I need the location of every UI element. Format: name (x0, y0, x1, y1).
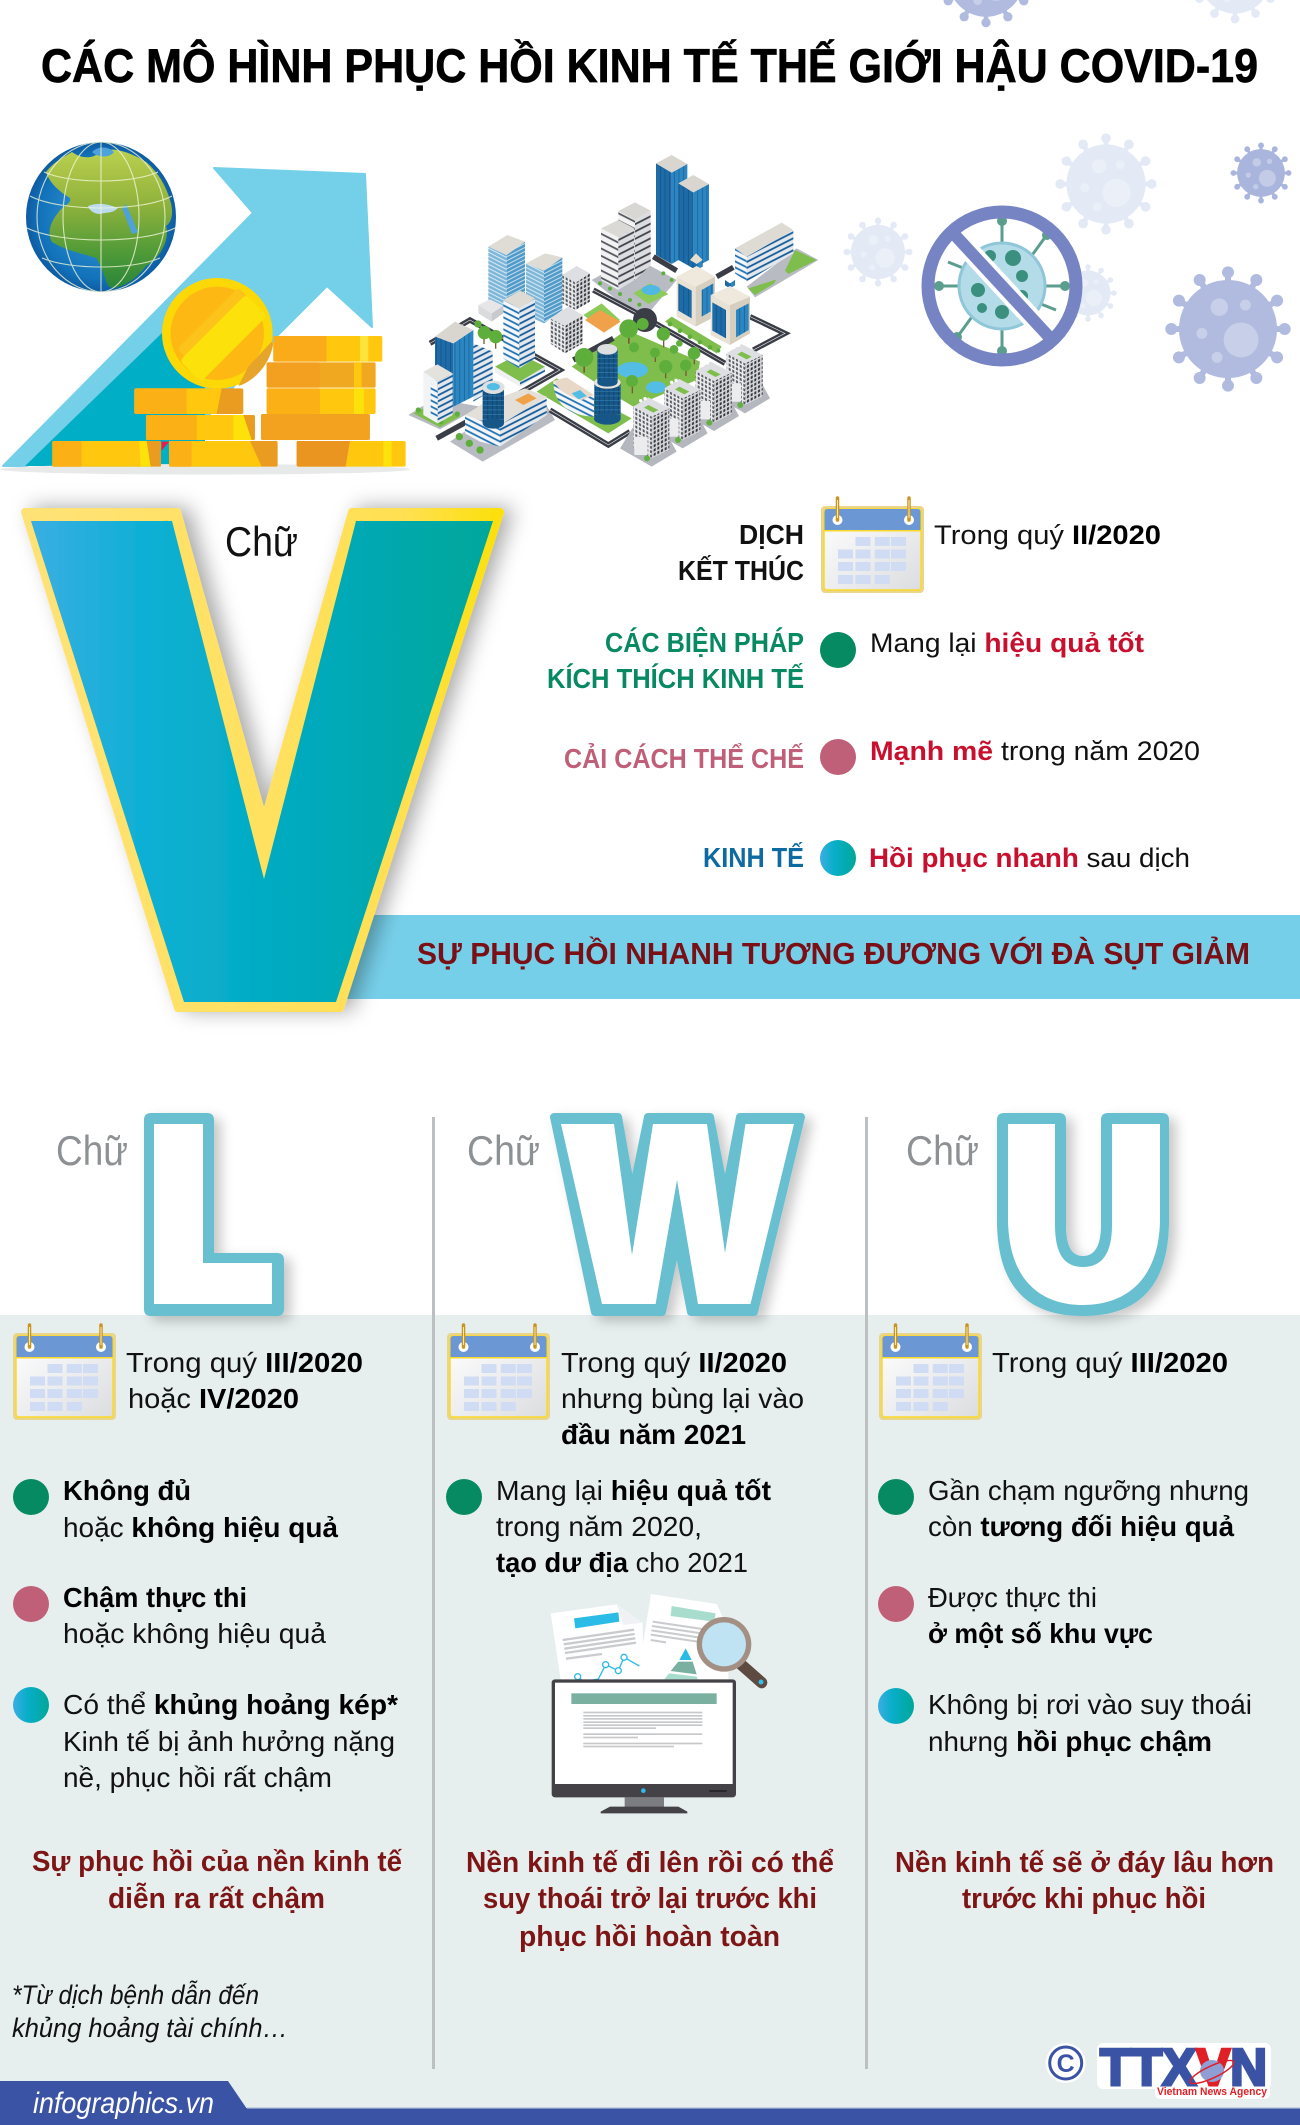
V: epidemic end label (678, 519, 804, 586)
V: economy value: Hồi phục nhanh sau dịch (869, 843, 1190, 873)
footnote: khủng hoảng tài chính… (12, 2013, 288, 2043)
curved building (553, 381, 594, 417)
footnote: *Từ dịch bệnh dẫn đến (12, 1980, 259, 2010)
V: institutional reform value: Mạnh mẽ trong năm 2020 (870, 736, 1200, 766)
cream towers (690, 260, 697, 270)
icon: green dot W (446, 1479, 482, 1515)
panel: W model (446, 1325, 834, 1953)
W conclusion: Nền kinh tế đi lên rồi có thể (466, 1847, 834, 1879)
L reform (63, 1582, 326, 1649)
L economy (63, 1689, 398, 1793)
panel: U model (878, 1325, 1274, 1915)
L reform: Chậm thực thi (63, 1582, 247, 1613)
L stimulus (63, 1475, 338, 1543)
U timing: Trong quý III/2020 (992, 1347, 1228, 1378)
virus: light behind sign (1059, 264, 1117, 322)
L timing: Trong quý III/2020 (126, 1347, 363, 1378)
U economy: nhưng hồi phục chậm (928, 1726, 1212, 1757)
L conclusion: Sự phục hồi của nền kinh tế (32, 1846, 403, 1878)
L reform: hoặc không hiệu quả (63, 1618, 326, 1649)
V: stimulus label: CÁC BIỆN PHÁP (605, 627, 804, 658)
V: stimulus label: KÍCH THÍCH KINH TẾ (547, 663, 804, 694)
back towers (656, 163, 672, 264)
trees (483, 335, 695, 393)
L conclusion (32, 1846, 403, 1915)
W timing: đầu năm 2021 (561, 1419, 746, 1450)
panel: L model (12, 1325, 403, 2043)
V: institutional reform label: CẢI CÁCH THỂ CHẾ (564, 742, 804, 774)
U conclusion (895, 1847, 1274, 1915)
icon: blue dot (820, 840, 856, 876)
W timing (561, 1347, 804, 1450)
icon: calendar L (13, 1325, 116, 1420)
icon: blue dot U (878, 1688, 914, 1724)
big coin (162, 278, 273, 389)
U reform: ở một số khu vực (928, 1618, 1153, 1649)
globe icon (26, 142, 176, 292)
big round tower (597, 349, 618, 383)
heading: Chữ (W): Chữ (467, 1127, 540, 1174)
footnote (12, 1980, 288, 2043)
W stimulus: Mang lại hiệu quả tốt (496, 1475, 771, 1506)
logo: copyright and TTXVN: C (1057, 2050, 1075, 2078)
virus: big purple (1165, 266, 1291, 392)
L economy: nề, phục hồi rất chậm (63, 1762, 332, 1793)
icon: green dot (820, 632, 856, 668)
virus: top edge light (1190, 0, 1280, 23)
W conclusion (466, 1847, 834, 1953)
W timing: Trong quý II/2020 (561, 1347, 787, 1378)
column dividers (432, 1117, 868, 2069)
letter U (997, 1113, 1169, 1316)
icon: pink dot (820, 739, 856, 775)
heading: Chữ (U): Chữ (906, 1127, 979, 1174)
U conclusion: trước khi phục hồi (962, 1883, 1206, 1915)
icon: pink dot U (878, 1586, 914, 1622)
icon: green dot U (878, 1479, 914, 1515)
U economy (928, 1689, 1252, 1757)
L stimulus: hoặc không hiệu quả (63, 1512, 338, 1543)
footer site name: infographics.vn (33, 2087, 214, 2120)
letter L (144, 1113, 284, 1316)
growth arrow (3, 168, 372, 466)
V: epidemic end label: DỊCH (739, 519, 804, 550)
footer bar (0, 2081, 1300, 2125)
W stimulus: trong năm 2020, (496, 1511, 702, 1542)
front grey buildings (713, 344, 770, 413)
icon: pink dot L (13, 1586, 49, 1622)
W stimulus (496, 1475, 771, 1578)
W conclusion: phục hồi hoàn toàn (519, 1921, 780, 1953)
lower panel background (0, 1315, 1300, 2110)
L conclusion: diễn ra rất chậm (108, 1881, 325, 1915)
V: epidemic end value: Trong quý II/2020 (934, 520, 1161, 550)
icon: calendar (821, 498, 924, 593)
U stimulus: còn tương đối hiệu quả (928, 1511, 1234, 1542)
gold coins (0, 278, 410, 475)
U economy: Không bị rơi vào suy thoái (928, 1689, 1252, 1720)
W conclusion: suy thoái trở lại trước khi (483, 1883, 817, 1915)
V: stimulus label (547, 627, 804, 694)
W stimulus: tạo dư địa cho 2021 (496, 1547, 748, 1578)
L economy: Có thể khủng hoảng kép* (63, 1689, 398, 1720)
V: stimulus value: Mang lại hiệu quả tốt (870, 628, 1144, 658)
headline band (340, 915, 1300, 999)
logo: copyright and TTXVN: Vietnam News Agency (1157, 2086, 1268, 2098)
U reform: Được thực thi (928, 1582, 1097, 1613)
logo: copyright and TTXVN: TTXVN (1100, 2039, 1267, 2097)
U conclusion: Nền kinh tế sẽ ở đáy lâu hơn (895, 1847, 1274, 1879)
icon: green dot L (13, 1479, 49, 1515)
mid towers (495, 353, 545, 382)
virus: light left (844, 218, 912, 286)
isometric city illustration (408, 155, 818, 467)
icon: calendar W (447, 1325, 550, 1420)
headline band text: SỰ PHỤC HỒI NHANH TƯƠNG ĐƯƠNG VỚI ĐÀ SỤT GIẢM (417, 935, 1250, 971)
U stimulus: Gần chạm ngưỡng nhưng (928, 1475, 1249, 1506)
L timing: hoặc IV/2020 (128, 1383, 299, 1414)
podium (465, 415, 500, 447)
big letter V (25, 512, 500, 1008)
W timing: nhưng bùng lại vào (561, 1383, 804, 1414)
roads (430, 257, 785, 445)
U stimulus (928, 1475, 1249, 1542)
icon: monitor with documents (551, 1594, 763, 1813)
no-virus sign (926, 210, 1078, 362)
L timing (126, 1347, 363, 1414)
L stimulus: Không đủ (63, 1475, 191, 1506)
U reform (928, 1582, 1153, 1649)
heading: Chữ (V): Chữ (225, 518, 298, 565)
virus: top edge dark (938, 0, 1034, 27)
virus: light upper (1055, 133, 1157, 235)
icon: blue dot L (13, 1687, 49, 1723)
virus: small purple (1231, 143, 1291, 203)
V: epidemic end label: KẾT THÚC (678, 555, 804, 586)
V: economy label: KINH TẾ (703, 842, 804, 873)
heading: Chữ (L): Chữ (56, 1127, 128, 1174)
icon: calendar U (879, 1325, 982, 1420)
letter W (554, 1117, 801, 1312)
L economy: Kinh tế bị ảnh hưởng nặng (63, 1726, 395, 1757)
